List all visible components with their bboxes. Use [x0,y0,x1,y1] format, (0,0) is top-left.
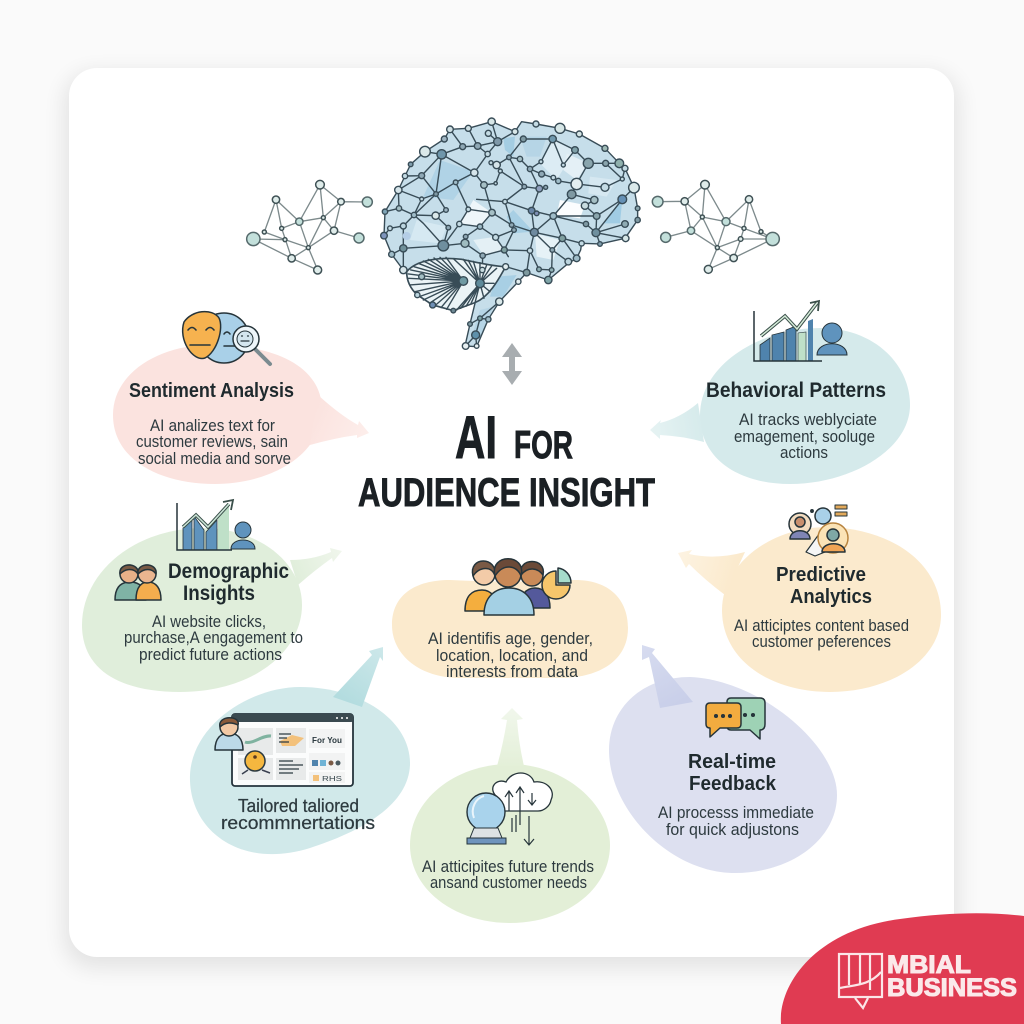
icon: for you window: RHS [322,776,342,783]
panel: real-time feedback [609,645,837,873]
icon: chart with person [754,301,847,361]
icon: crystal ball and cloud [467,773,552,845]
text: demographic description: predict future actions [139,646,282,664]
text: behavioral description: actions [780,444,828,462]
text: behavioral description: emagement, sooluge [734,428,875,446]
text: center description: AI identifis age, gender, [428,630,593,648]
panel: future trends [410,708,610,923]
arrow: tailored tail [333,647,383,707]
left neural network cluster [247,180,372,274]
text: tailored heading: recommnertations [221,813,375,833]
text: feedback description: AI processs immediate [658,804,814,822]
logo text [887,951,1017,1002]
panel: sentiment analysis [113,312,369,484]
right neural network cluster [652,180,779,273]
heading: demographic insights: Insights [183,582,255,605]
arrow: sentiment tail [310,395,369,445]
card shadow [64,72,959,968]
icon: masks and magnifier [183,312,270,364]
panel: demographic insights [82,500,342,692]
text: center description: interests from data [446,663,579,681]
text: center description: location, location, and [436,647,588,665]
bubble: behavioral [700,328,910,484]
brain nodes [381,118,640,349]
double arrow between brain and title [502,343,522,385]
text: behavioral description: AI tracks weblyciate [739,411,877,429]
brain network edges [384,122,634,346]
text: behavioral description [734,411,877,462]
text: center description [428,630,593,681]
arrow: feedback tail [642,645,693,708]
bubble: tailored [190,687,410,854]
text: demographic description: AI website clicks, [152,613,266,631]
bubble: demographic [82,528,302,692]
text: sentiment description: social media and sorve [138,450,291,468]
logo text: MBIAL [887,951,971,979]
text: demographic description [124,613,303,664]
text: trends description [422,858,594,892]
text: tailored heading [221,796,375,833]
text: feedback description [658,804,814,839]
bubble: trends [410,764,610,923]
red corner shape [781,913,1024,1024]
panel: center audience data [392,559,628,681]
text: trends description: AI atticipites future trends [422,858,594,876]
icon: for you window [215,714,353,786]
heading: sentiment analysis: Sentiment Analysis [129,380,294,402]
heading: demographic insights [168,560,289,605]
icon: chat bubbles [706,698,765,739]
logo icon [839,954,882,1008]
bubble: predictive [722,527,941,692]
heading: predictive analytics: Analytics [790,586,872,608]
icon: growth chart with person [177,500,255,550]
text: feedback description: for quick adjustons [666,821,799,839]
cerebellum [407,258,506,311]
heading: real-time feedback: Real-time [688,751,776,773]
bubble: sentiment [113,345,322,484]
brain outline [384,122,638,347]
arrow: demographic tail [290,548,342,585]
text: sentiment description: AI analizes text for [150,417,275,435]
icon: for you window: For You [312,735,342,745]
arrow: predictive tail [678,550,745,595]
heading: predictive analytics: Predictive [776,564,866,586]
icon: user avatar [215,718,243,750]
text: sentiment description: customer reviews, sain [136,433,288,451]
icon: audience group with pie chart [465,559,571,615]
text: trends description: ansand customer needs [430,874,587,892]
heading: behavioral patterns: Behavioral Patterns [706,379,886,402]
panel: behavioral patterns [650,301,910,484]
brain illustration [381,118,640,349]
logo text: BUSINESS [887,974,1017,1002]
heading: predictive analytics [776,564,872,608]
heading: real-time feedback: Feedback [689,773,777,795]
bubble: center [392,580,628,678]
heading: real-time feedback [688,751,777,795]
bubble: feedback [609,677,837,873]
title: FOR [514,424,573,467]
title [358,404,655,515]
title: AUDIENCE INSIGHT [358,471,655,515]
heading: demographic insights: Demographic [168,560,289,583]
icon: two people [115,565,161,600]
text: demographic description: purchase,A engagement to [124,629,303,647]
text: predictive description [734,617,909,651]
text: tailored heading: Tailored taliored [238,796,359,816]
text: predictive description: AI atticiptes content based [734,617,909,635]
text: predictive description: customer peferences [752,633,891,651]
text: sentiment description [136,417,291,468]
logo badge [781,913,1024,1024]
title: AI [455,404,497,471]
panel: predictive analytics [678,505,941,692]
arrow: trends tail [497,708,524,766]
icon: predictive people and bulb [789,505,848,556]
main white card [69,68,954,957]
arrow: behavioral tail [650,403,704,442]
panel: tailored recommendations [190,647,410,854]
